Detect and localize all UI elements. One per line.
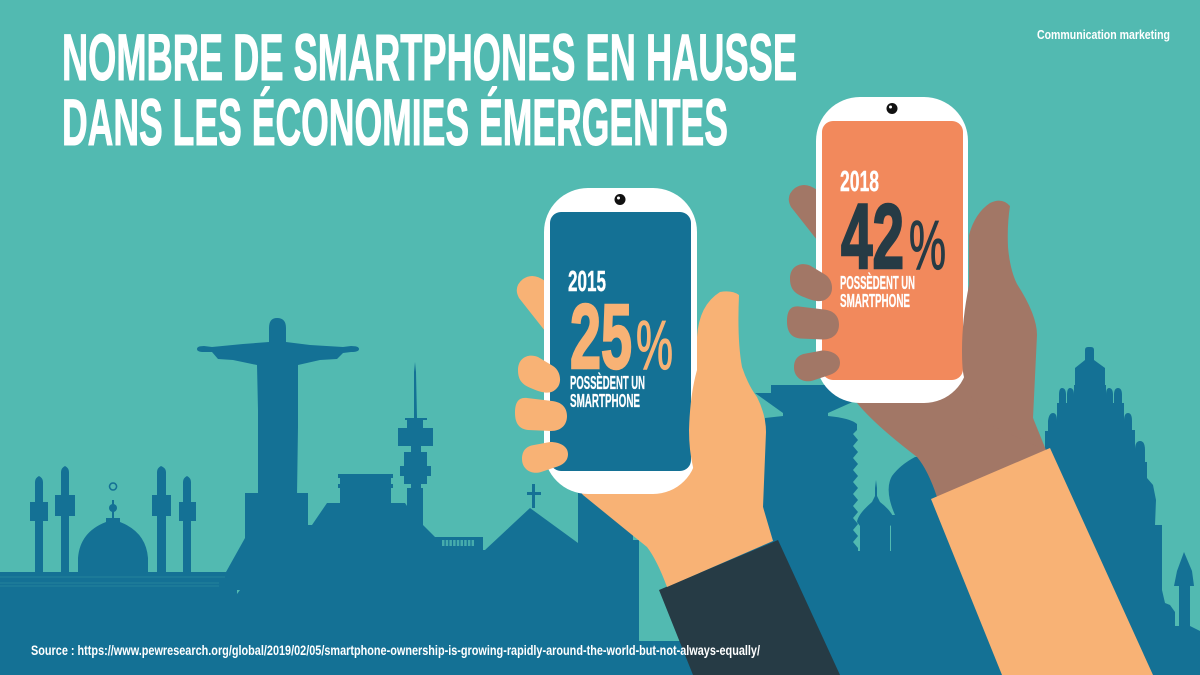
section label: Communication marketing: [1037, 27, 1170, 42]
fingers: [787, 264, 840, 381]
phone body: [544, 188, 697, 494]
caption 2018: [840, 272, 915, 311]
hand back and index finger: [789, 185, 1046, 497]
skyline of emerging-economy landmarks: [0, 318, 1200, 675]
phone screen: [550, 212, 691, 471]
year 2015: 2015: [568, 266, 606, 298]
25 percent: 25: [570, 286, 632, 388]
fingers: [515, 356, 568, 473]
year 2018: 2018: [840, 166, 879, 198]
Christ the Redeemer statue: [197, 318, 359, 495]
mosque with dome and minarets: [30, 466, 196, 573]
25 percent: %: [636, 306, 673, 384]
thumb and palm: [689, 291, 773, 541]
sleeve, peach: [931, 448, 1153, 675]
42 percent: %: [909, 206, 946, 284]
42 percent: 42: [841, 186, 904, 288]
title: [62, 20, 797, 159]
church cross: [527, 484, 541, 508]
camera: [886, 103, 898, 114]
caption 2015: SMARTPHONE: [570, 391, 640, 411]
phone in hand: 2018: [787, 97, 1153, 675]
caption 2018: SMARTPHONE: [840, 291, 910, 311]
caption 2018: POSSÈDENT UN: [840, 272, 915, 293]
phone screen: [822, 121, 963, 380]
hand back and index finger: [517, 276, 773, 587]
phone in hand: 2015: [515, 188, 840, 675]
phone body: [816, 97, 968, 403]
caption 2015: [570, 372, 645, 411]
camera: [614, 194, 626, 205]
windows and ground lines on the skyline: [0, 543, 474, 594]
sleeve, dark: [659, 540, 840, 675]
source line: Source : https://www.pewresearch.org/global/2019/02/05/smartphone-ownership-is-growing-rapidly-around-the-world-but-not-always-equally/: [31, 642, 760, 658]
caption 2015: POSSÈDENT UN: [570, 372, 645, 393]
thumb and palm: [962, 201, 1045, 450]
main skyline silhouette: [0, 347, 1200, 675]
